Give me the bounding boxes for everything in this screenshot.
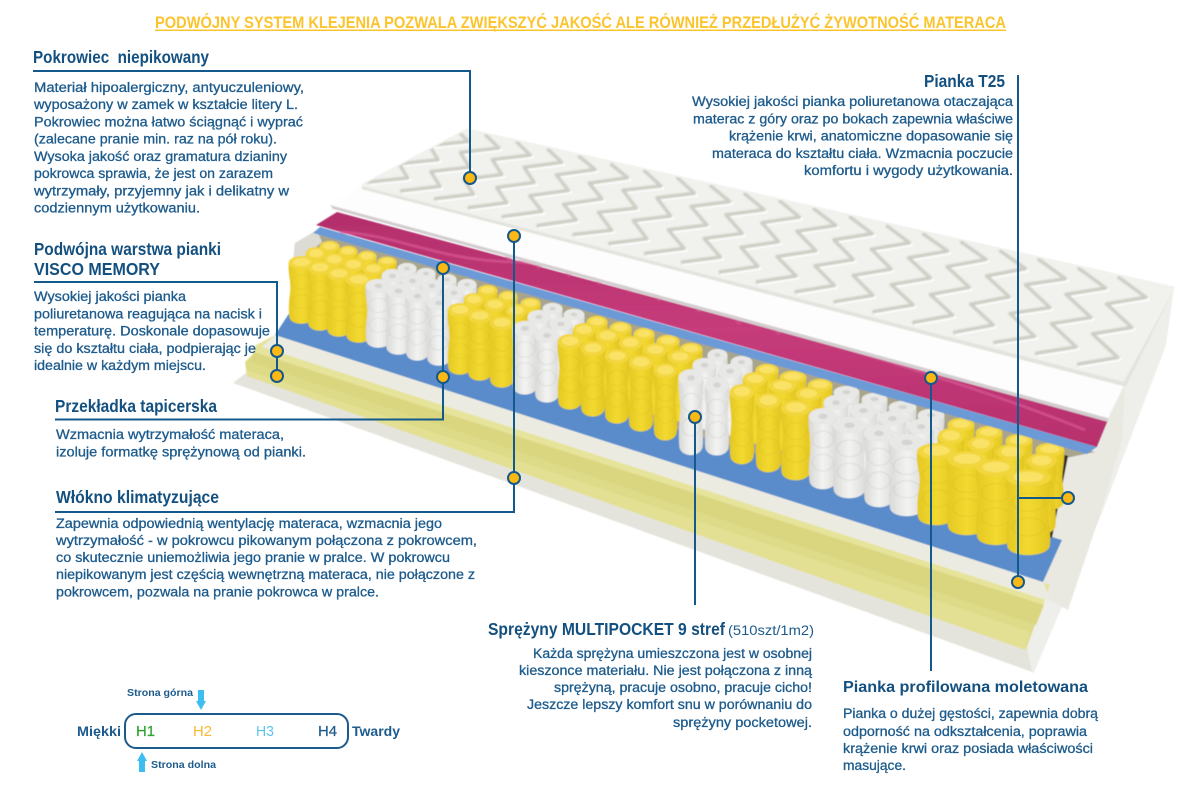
text block: Pokrowiec niepikowany: wytrzymały, przyjemny jak i delikatny w: [33, 184, 289, 198]
blue fibre layer: [275, 312, 1062, 582]
callout: Przekładka line and dots: [55, 262, 449, 420]
text block: Włókno klimatyzujące: niepikowanym jest częścią wewnętrzną materaca, nie połączone z: [56, 567, 475, 582]
text block: Sprężyny MULTIPOCKET: [488, 619, 814, 730]
icon: arrow up: [137, 752, 147, 772]
text block: Podwójna warstwa pianki VISCO MEMORY: [34, 239, 270, 373]
bottom base layer: [233, 372, 1032, 672]
text block: Podwójna warstwa pianki VISCO MEMORY: temperaturę. Doskonale dopasowuje: [34, 324, 270, 338]
cream spacer layer: [262, 335, 1052, 602]
text block: Pokrowiec niepikowany: Materiał hipoalergiczny, antyuczuleniowy,: [34, 80, 304, 95]
text block: Włókno klimatyzujące: pokrowcem, pozwala na pranie pokrowca w pralce.: [56, 584, 379, 600]
text block: Sprężyny MULTIPOCKET: sprężyną, pracuje osobno, pracuje cicho!: [554, 680, 812, 695]
text block: Podwójna warstwa pianki VISCO MEMORY: poliuretanowa reagująca na nacisk i: [34, 306, 262, 322]
text block: Podwójna warstwa pianki VISCO MEMORY: Wysokiej jakości pianka: [34, 289, 187, 304]
profiled foam layer lower: [245, 345, 1040, 650]
profiled foam layer upper: [250, 335, 1050, 625]
text block: Pianka profilowana moletowana: masujące.: [843, 758, 906, 773]
text block: Włókno klimatyzujące: wytrzymałość - w pokrowcu pikowanym połączona z pokrowcem,: [55, 533, 477, 548]
springs back row: [319, 241, 1064, 510]
right side face of the mattress: [1020, 288, 1173, 672]
text block: Pokrowiec niepikowany: [33, 47, 304, 216]
text block: Podwójna warstwa pianki VISCO MEMORY: idealnie w każdym miejscu.: [34, 358, 206, 373]
text block: Sprężyny MULTIPOCKET: kieszonce materiału. Nie jest połączona z inną: [519, 663, 813, 678]
text block: Przekładka tapicerska: izoluje formatkę sprężynową od pianki.: [56, 444, 306, 460]
icon: arrow down: [196, 690, 206, 710]
label: Strona dolna: Strona dolna: [151, 759, 216, 771]
label: Strona górna: Strona górna: [127, 687, 193, 699]
springs front row: [289, 256, 1051, 555]
quilted cover: [363, 130, 1173, 385]
firmness scale box: [125, 714, 348, 748]
text block: Pokrowiec niepikowany: pokrowca sprawia, że jest on zarazem: [34, 166, 273, 181]
callout: Pianka profilowana line and dot: [925, 372, 937, 671]
firmness scale: [77, 687, 400, 772]
text block: Pianka profilowana moletowana: odporność na odkształcenia, poprawia: [843, 724, 1088, 739]
H3: H3: [256, 724, 274, 740]
text block: Przekładka tapicerska: [55, 396, 306, 460]
text block: Włókno klimatyzujące: Zapewnia odpowiednią wentylację materaca, wzmacnia jego: [56, 516, 442, 531]
text block: Pianka T25: Wysokiej jakości pianka poliuretanowa otaczająca: [692, 94, 1014, 109]
text block: Podwójna warstwa pianki VISCO MEMORY: Podwójna warstwa pianki: [34, 239, 221, 259]
text block: Pianka T25: materaca do kształtu ciała. Wzmacnia poczucie: [712, 146, 1013, 161]
text block: Pianka T25: [692, 71, 1014, 178]
text block: Włókno klimatyzujące: [55, 487, 477, 600]
text block: Przekładka tapicerska: Przekładka tapicerska: [55, 396, 217, 416]
text block: Sprężyny MULTIPOCKET: Sprężyny MULTIPOCKET 9 stref: [488, 619, 725, 639]
pocket springs: [289, 241, 1064, 555]
text block: Pianka T25: Pianka T25: [924, 71, 1005, 91]
text block: Sprężyny MULTIPOCKET: Jeszcze lepszy komfort snu w porównaniu do: [527, 697, 812, 712]
mattress cross-section illustration: [233, 130, 1173, 672]
text block: Pokrowiec niepikowany: wyposażony w zamek w kształcie litery L.: [33, 97, 298, 112]
label: Miękki: Miękki: [77, 723, 121, 739]
text block: Pokrowiec niepikowany: Pokrowiec można łatwo ściągnąć i wyprać: [34, 114, 303, 130]
callout: Włókno line and dots: [55, 230, 520, 512]
text block: Pianka T25: komfortu i wygody użytkowania.: [804, 163, 1013, 178]
text block: Pokrowiec niepikowany: codziennym użytkowaniu.: [34, 200, 200, 216]
callout: Sprężyny line and dot: [689, 411, 701, 605]
text block: Włókno klimatyzujące: Włókno klimatyzujące: [56, 487, 219, 507]
back frame of the spring block: [290, 232, 1095, 542]
H4: H4: [318, 724, 337, 740]
text block: Włókno klimatyzujące: co skutecznie uniemożliwia jego pranie w pralce. W pokrowcu: [56, 550, 450, 565]
H2: H2: [193, 724, 212, 740]
text block: Sprężyny MULTIPOCKET: sprężyny pocketowej.: [673, 715, 812, 730]
text block: Pianka T25: materac z góry oraz po bokach zapewnia właściwe: [693, 112, 1013, 126]
springs middle row: [305, 247, 1056, 534]
text block: Pokrowiec niepikowany: Wysoka jakość oraz gramatura dzianiny: [34, 149, 287, 164]
text block: Podwójna warstwa pianki VISCO MEMORY: się do kształtu ciała, podpierając je: [34, 341, 256, 356]
callout: Visco line and dots: [34, 282, 283, 382]
text block: Pianka T25: krążenie krwi, anatomiczne dopasowanie się: [729, 128, 1013, 144]
text block: Pokrowiec niepikowany: (zalecane pranie min. raz na pół roku).: [34, 132, 277, 146]
label: Twardy: Twardy: [352, 723, 400, 739]
title: PODWÓJNY SYSTEM KLEJENIA POZWALA ZWIĘKSZYĆ JAKOŚĆ ALE RÓWNIEŻ PRZEDŁUŻYĆ ŻYWOTNOŚĆ MATERACA: [155, 13, 1006, 32]
blue strip under memory foam: [313, 227, 1097, 454]
text block: Pianka profilowana moletowana: krążenie krwi oraz posiada właściwości: [843, 741, 1093, 756]
H1: H1: [136, 724, 155, 740]
text block: Pianka profilowana moletowana: Pianka profilowana moletowana: [843, 679, 1088, 696]
callout: Pianka T25 line and dots: [1012, 75, 1074, 588]
pink visco memory foam layer: [316, 212, 1108, 447]
white T25 foam layer: [330, 185, 1125, 422]
text block: Sprężyny MULTIPOCKET: Każda sprężyna umieszczona jest w osobnej: [533, 646, 812, 661]
text block: Przekładka tapicerska: Wzmacnia wytrzymałość materaca,: [56, 427, 284, 442]
text block: Sprężyny MULTIPOCKET: (510szt/1m2): [728, 622, 814, 638]
text block: Pianka profilowana moletowana: [843, 679, 1099, 773]
text block: Podwójna warstwa pianki VISCO MEMORY: VISCO MEMORY: [34, 259, 160, 279]
text block: Pokrowiec niepikowany: Pokrowiec niepikowany: [33, 47, 209, 67]
callout: Pokrowiec line and dot: [33, 71, 476, 184]
text block: Pianka profilowana moletowana: Pianka o dużej gęstości, zapewnia dobrą: [843, 706, 1099, 721]
